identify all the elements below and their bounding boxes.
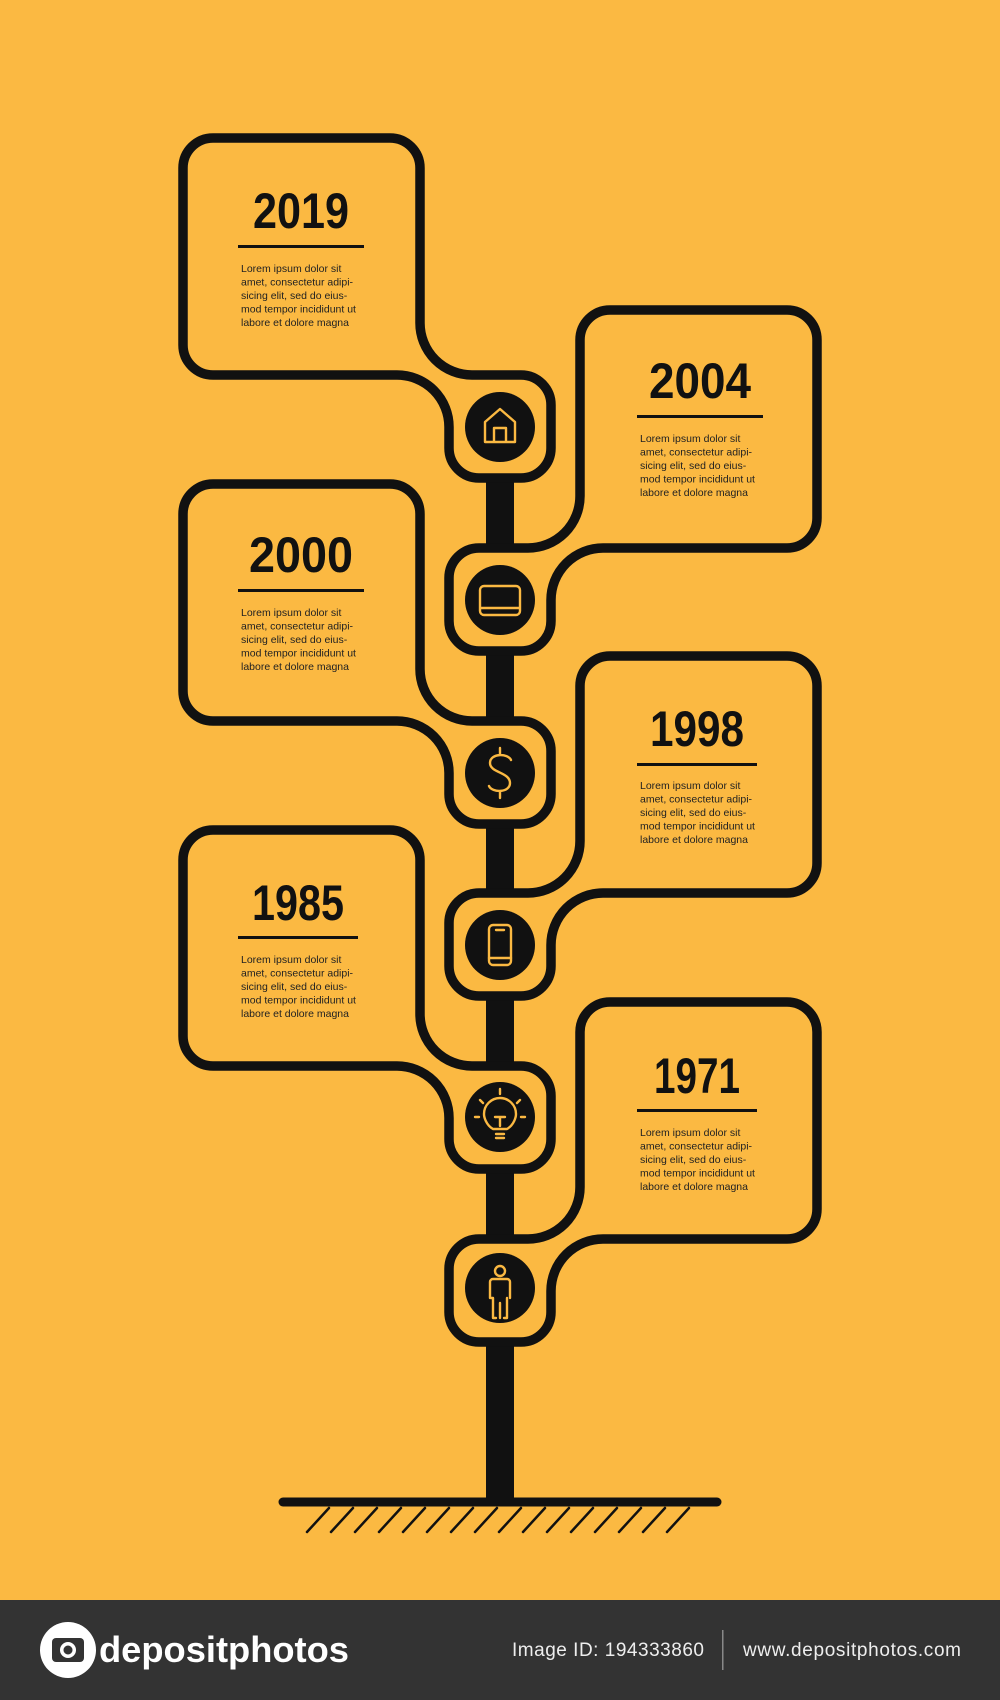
panel: 2004: Lorem ipsum dolor sit	[640, 433, 740, 445]
panel: 1971: Lorem ipsum dolor sit	[640, 1127, 740, 1139]
panel: 2004: 2004	[649, 353, 751, 409]
panel: 2019: amet, consectetur adipi-	[241, 276, 354, 288]
panel: 1998: Lorem ipsum dolor sit	[640, 780, 740, 792]
panel: 2004: amet, consectetur adipi-	[640, 446, 753, 458]
icon: dollar	[465, 738, 535, 808]
panel: 2000: labore et dolore magna	[241, 661, 349, 673]
panel: 1971: mod tempor incididunt ut	[640, 1168, 755, 1180]
icon: phone	[465, 910, 535, 980]
panel: 2000	[183, 484, 551, 824]
panel: 1998: labore et dolore magna	[640, 834, 748, 846]
panel: 2004: mod tempor incididunt ut	[640, 474, 755, 486]
footer	[0, 1600, 1000, 1700]
panel: 1998: mod tempor incididunt ut	[640, 820, 755, 832]
panel: 1971	[449, 1002, 817, 1342]
panel: 1985: amet, consectetur adipi-	[241, 968, 354, 980]
panel: 1971: labore et dolore magna	[640, 1181, 748, 1193]
panel: 1985: mod tempor incididunt ut	[241, 994, 356, 1006]
panel: 1971: 1971	[654, 1048, 740, 1104]
icon: logo camera	[40, 1622, 96, 1678]
panel: 2019: mod tempor incididunt ut	[241, 304, 356, 316]
icon: laptop	[465, 565, 535, 635]
panel: 1998	[449, 656, 817, 996]
panel: 1985: 1985	[252, 875, 344, 931]
panel: 1998: sicing elit, sed do eius-	[640, 807, 747, 819]
panel: 2000: 2000	[249, 527, 353, 583]
panel: 1998: 1998	[650, 701, 744, 757]
icon: person	[465, 1253, 535, 1323]
footer: depositphotos	[99, 1629, 349, 1670]
panel: 1971: sicing elit, sed do eius-	[640, 1154, 747, 1166]
panel: 1971: amet, consectetur adipi-	[640, 1140, 753, 1152]
panel: 2019: labore et dolore magna	[241, 317, 349, 329]
panel: 2019: 2019	[253, 183, 349, 239]
footer: www.depositphotos.com	[742, 1640, 961, 1661]
ground	[283, 1502, 717, 1532]
panel: 2019	[183, 138, 551, 478]
panel: 2019: sicing elit, sed do eius-	[241, 290, 348, 302]
panel: 1985: labore et dolore magna	[241, 1008, 349, 1020]
panel: 2000: amet, consectetur adipi-	[241, 620, 354, 632]
panel: 1985	[183, 830, 551, 1169]
panel: 2004	[449, 310, 817, 651]
panel: 1998: amet, consectetur adipi-	[640, 794, 753, 806]
panel: 1985: sicing elit, sed do eius-	[241, 981, 348, 993]
panel: 2000: Lorem ipsum dolor sit	[241, 607, 341, 619]
footer: Image ID: 194333860	[512, 1640, 704, 1661]
panel: 2000: sicing elit, sed do eius-	[241, 634, 348, 646]
panel: 2004: sicing elit, sed do eius-	[640, 460, 747, 472]
stem	[486, 478, 514, 1502]
panel: 2019: Lorem ipsum dolor sit	[241, 263, 341, 275]
panel: 2000: mod tempor incididunt ut	[241, 648, 356, 660]
icon: lightbulb	[465, 1082, 535, 1152]
icon: house	[465, 392, 535, 462]
panel: 2004: labore et dolore magna	[640, 487, 748, 499]
panel: 1985: Lorem ipsum dolor sit	[241, 954, 341, 966]
